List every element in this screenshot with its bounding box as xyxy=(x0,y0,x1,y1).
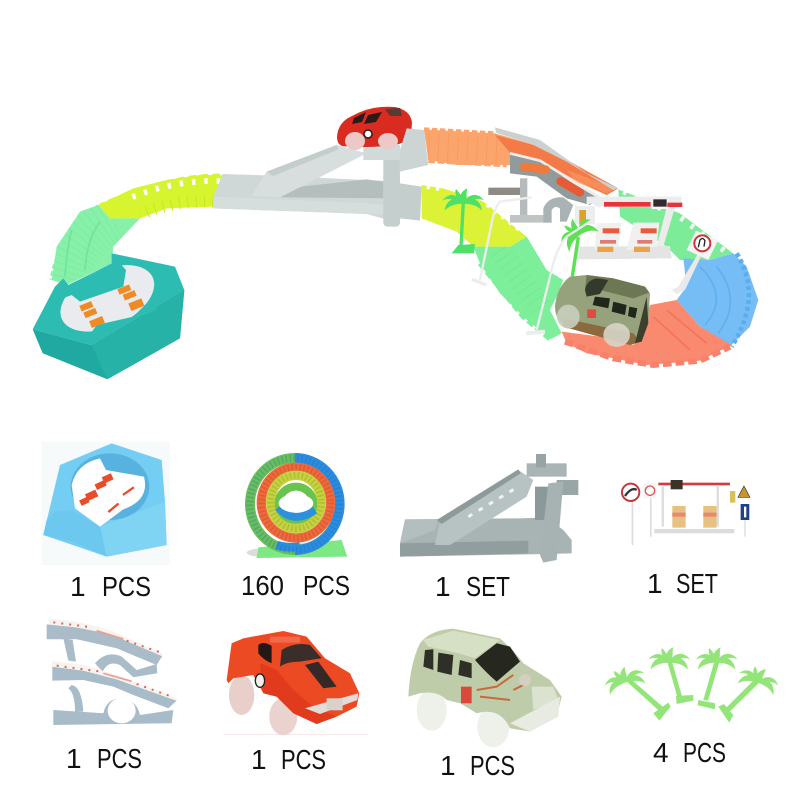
label: 4 PCS xyxy=(653,737,726,768)
label: 1 SET: SET xyxy=(466,571,510,602)
label: 1 SET xyxy=(435,571,510,602)
label: 1 PCS xyxy=(440,750,515,781)
label: 1 PCS: 1 xyxy=(70,571,86,602)
label: 1 SET xyxy=(647,568,718,599)
street lamps xyxy=(472,197,595,333)
orange track section xyxy=(424,129,618,195)
lower ramp xyxy=(52,667,177,725)
red car on bridge xyxy=(337,107,412,150)
palm 3 xyxy=(696,647,737,709)
label: 1 SET: 1 xyxy=(647,568,663,599)
double ramp with orange inserts xyxy=(495,127,618,205)
grey bridge right end xyxy=(400,128,428,221)
grey ramp supports xyxy=(488,178,573,223)
no U-turn sign xyxy=(672,231,718,294)
red track section xyxy=(562,300,732,365)
panel: grey ramp, 1 SET xyxy=(400,454,578,563)
track teeth xyxy=(250,458,339,550)
gas station canopy xyxy=(575,197,682,247)
hexagon launcher base xyxy=(33,252,184,379)
label: 1 PCS xyxy=(66,743,142,774)
panel: green car, 1 PCS xyxy=(408,629,562,747)
label: 1 PCS: PCS xyxy=(97,743,142,774)
label: 1 SET: SET xyxy=(676,568,718,599)
panel: assembled track scene xyxy=(33,107,758,379)
blue track section xyxy=(677,253,758,347)
label: 4 PCS: PCS xyxy=(683,737,726,768)
upper ramp xyxy=(47,624,162,677)
label: 160 PCS: PCS xyxy=(303,570,350,601)
panel: red car, 1 PCS xyxy=(224,631,369,735)
palm 1 xyxy=(601,662,671,721)
yellow track curve xyxy=(98,175,222,218)
green army car on track xyxy=(555,275,650,347)
label: 1 PCS xyxy=(70,571,151,602)
yellow track section xyxy=(422,185,527,247)
panel: road signs and gas station, 1 SET xyxy=(622,480,750,545)
label: 1 PCS: PCS xyxy=(470,750,515,781)
upper green track section xyxy=(618,189,733,260)
label: 1 SET: 1 xyxy=(435,571,451,602)
lower green track section xyxy=(473,237,563,339)
label: 160 PCS: 160 xyxy=(241,570,284,601)
left track with hexagon launcher xyxy=(33,145,400,379)
palm 4 xyxy=(718,662,782,723)
green track curve xyxy=(52,205,140,285)
label: 1 PCS: PCS xyxy=(281,744,326,775)
label: 1 PCS: 1 xyxy=(66,743,82,774)
label: 1 PCS xyxy=(251,744,326,775)
grey bridge deck xyxy=(213,145,400,227)
palm trees xyxy=(443,188,600,277)
label: 1 PCS: PCS xyxy=(102,571,151,602)
panel: double ramp, 1 PCS xyxy=(47,618,177,725)
label: 160 PCS xyxy=(241,570,350,601)
right track loop xyxy=(400,127,758,365)
gas station platform and pumps xyxy=(577,223,672,259)
palm 2 xyxy=(649,647,693,704)
label: 1 PCS: 1 xyxy=(440,750,456,781)
panel: four palm trees, 4 PCS xyxy=(601,647,782,723)
panel: blue launcher, 1 PCS xyxy=(42,442,170,565)
label: 1 PCS: 1 xyxy=(251,744,267,775)
label: 4 PCS: 4 xyxy=(653,737,669,768)
panel: coiled track, 160 PCS xyxy=(247,458,347,558)
